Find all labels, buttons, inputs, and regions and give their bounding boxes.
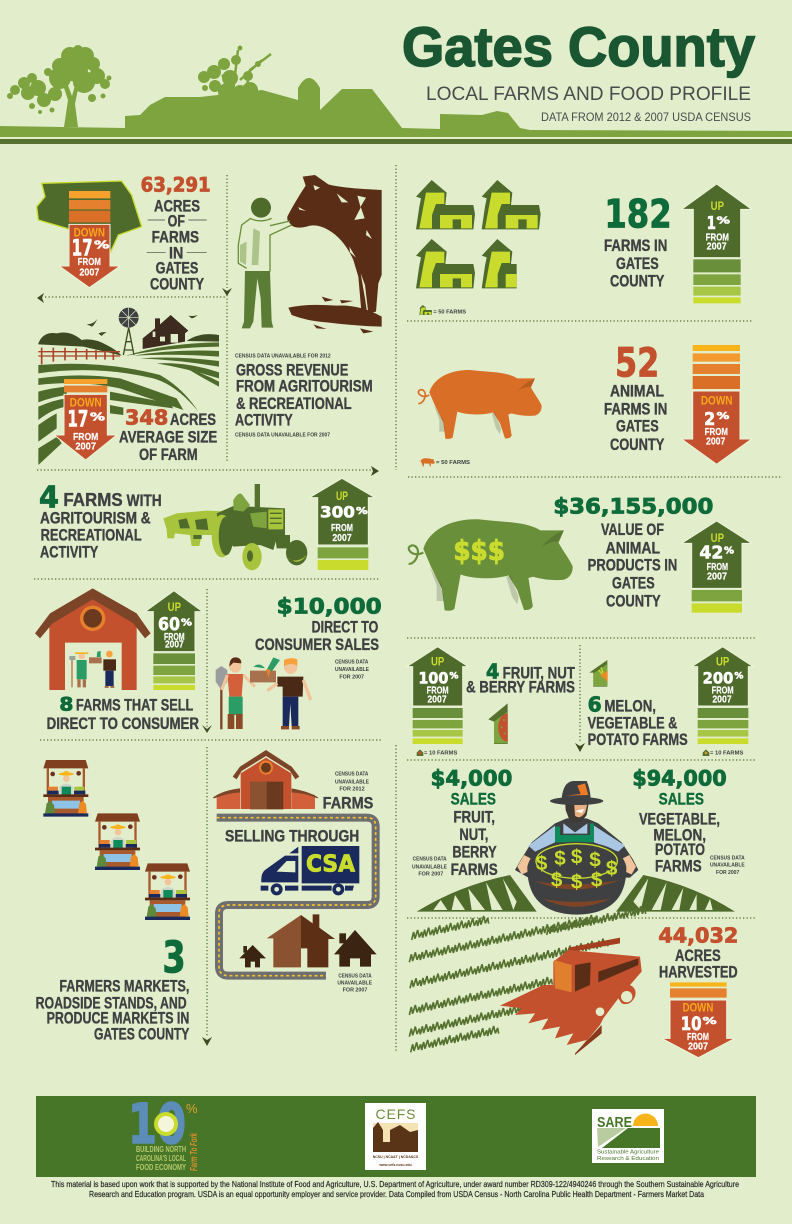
stat: $4,000 fruit sales: FRUIT, — [453, 808, 495, 827]
stat: 182 farms: 182 — [604, 191, 672, 237]
stat: $36,155,000: PRODUCTS IN — [588, 556, 677, 575]
logo: CEFS: www.cefs.ncsu.edu — [378, 1163, 412, 1167]
arrow: up 100%: % — [449, 672, 459, 682]
title: Gates County — [402, 15, 755, 78]
stat: 348 acres average size: OF FARM — [139, 445, 198, 464]
stat: $94,000 vegetable sales: FOR 2007 — [716, 870, 739, 876]
legend: 10 farms carrot — [703, 749, 744, 756]
header: farm landscape silhouette — [0, 45, 792, 137]
icon: farm buildings pictogram — [416, 180, 541, 288]
stat: 3 farmers markets: GATES COUNTY — [94, 1025, 189, 1044]
text: gross revenue from agritourism: & RECREATIONAL — [236, 394, 352, 413]
subtitle: LOCAL FARMS AND FOOD PROFILE — [426, 83, 751, 105]
arrow: up 42%: FROM — [707, 562, 728, 573]
arrow: down 17% acres: DOWN — [74, 226, 105, 240]
stat: 8 farms direct to consumer: FARMS THAT SELL — [76, 696, 193, 715]
logo: CEFS — [365, 1103, 426, 1170]
arrow: up 42%: % — [724, 546, 735, 557]
text: gross revenue from agritourism: FROM AGRITOURISM — [236, 377, 373, 396]
icon: crop rows — [409, 906, 646, 1052]
arrow: up 300%: 2007 — [332, 533, 352, 544]
census note 2012: CENSUS DATA — [335, 772, 368, 778]
footer credits: Research and Education program. USDA is an equal opportunity employer and service provider. Data Compiled from USDA Census - North Carolina Public Health Department - Farmers Market Data — [89, 1190, 704, 1199]
panel: markets and CSA — [36, 750, 377, 1044]
stat: 182 farms: GATES — [616, 254, 659, 273]
arrow: up 1%: 2007 — [707, 241, 727, 252]
header stripes — [0, 139, 792, 144]
stat: $36,155,000: $36,155,000 — [553, 494, 713, 519]
stat: $4,000 fruit sales: UNAVAILABLE — [412, 864, 447, 870]
icon: farmers with vegetable crate — [216, 657, 311, 729]
arrow: down 2% — [682, 345, 752, 464]
icon: houses — [239, 914, 377, 967]
arrow: up 60%: % — [181, 617, 193, 628]
stat: 63,291 acres of farms: IN — [169, 243, 183, 262]
arrow: up 100%: 2007 — [427, 694, 447, 705]
stat: 52 animal farms — [604, 341, 667, 454]
logo: CEFS: CEFS — [376, 1106, 416, 1122]
arrow: up 100% — [407, 647, 468, 744]
census note 2012: UNAVAILABLE — [335, 779, 369, 785]
arrow: up 1%: % — [717, 216, 731, 227]
icon: CSA delivery truck — [261, 846, 359, 895]
logo: SARE: Research & Education — [597, 1156, 659, 1162]
stat: 6 melon, vegetable, potato farms: VEGETABLE & — [588, 713, 677, 732]
stat: 63,291 acres of farms: COUNTY — [150, 274, 204, 293]
stat: 44,032 acres harvested — [658, 923, 738, 981]
icon: melon barn — [488, 703, 508, 744]
arrow: up 300%: UP — [336, 489, 348, 503]
icon: child petting cow — [238, 198, 292, 328]
stat: 44,032 acres harvested: 44,032 — [658, 923, 738, 947]
stat: 44,032 acres harvested: HARVESTED — [659, 962, 738, 981]
arrow: up 60%: 2007 — [165, 640, 184, 651]
icon: farmer holding bowl of money: $ — [571, 870, 583, 893]
icon: cow — [287, 175, 382, 333]
arrow: down 10%: 2007 — [688, 1041, 708, 1052]
stat: 52 animal farms: GATES — [616, 417, 659, 436]
stat: $10,000 direct to consumer: FOR 2007 — [339, 674, 364, 680]
stat: $10,000 direct to consumer: CONSUMER SALES — [255, 635, 379, 654]
stat: $4,000 fruit sales: FOR 2007 — [418, 872, 443, 878]
stat: 182 farms: COUNTY — [610, 272, 664, 291]
arrow: down 10%: FROM — [687, 1032, 709, 1043]
panel: animal product value and crop farms — [407, 494, 753, 756]
panel: agritourism farms — [35, 478, 382, 733]
text: gross revenue from agritourism — [235, 353, 373, 438]
icon: CSA delivery truck: CSA — [306, 850, 355, 878]
icon: farmer holding bowl of money: $ — [536, 852, 548, 875]
arrow: down 17% acres: FROM — [78, 257, 101, 268]
logo: CEFS: NCSU | NCA&T | NCDA&CS — [373, 1155, 419, 1159]
stat: 4 fruit, nut and berry farms — [466, 659, 575, 697]
dividers and flow arrows middle left — [34, 579, 383, 1046]
icon: farm landscape — [38, 308, 219, 465]
stat: 44,032 acres harvested: ACRES — [675, 946, 721, 965]
arrow: down 2%: 2 — [704, 410, 715, 430]
stat: $4,000 fruit sales: NUT, — [459, 825, 488, 844]
arrow: down 17% acres: 17 — [72, 237, 93, 262]
icon: farmer holding bowl of money: $ — [551, 869, 563, 892]
stat: 52 animal farms: COUNTY — [610, 435, 664, 454]
stat: $10,000 direct to consumer: DIRECT TO — [312, 617, 378, 636]
stat: $4,000 fruit sales: BERRY — [452, 843, 497, 862]
census note 2007: UNAVAILABLE — [337, 980, 372, 986]
legend: 50 farms pig — [419, 458, 470, 467]
arrow: up 60%: 60 — [158, 615, 180, 635]
icon: red barn with farmers — [35, 588, 151, 690]
stat: 63,291 acres of farms — [141, 174, 211, 293]
arrow: down 17% farm size: 2007 — [75, 442, 96, 453]
stat: 6 melon, vegetable, potato farms: MELON, — [604, 697, 656, 716]
stat: $4,000 fruit sales: FARMS — [451, 860, 498, 879]
stat: 4 farms with agritourism: RECREATIONAL — [41, 526, 142, 545]
stat: 8 farms direct to consumer: DIRECT TO CONSUMER — [47, 714, 199, 733]
stat: 8 farms direct to consumer: 8 — [59, 695, 73, 716]
text: gross revenue from agritourism: ACTIVITY — [235, 411, 293, 430]
arrow: up 300%: FROM — [331, 523, 353, 534]
stat: $4,000 fruit sales: $4,000 — [431, 767, 512, 792]
panel: acres, cow, farm size — [37, 174, 382, 465]
stat: 3 farmers markets: ROADSIDE STANDS, AND — [36, 993, 187, 1012]
arrow: down 2%: DOWN — [701, 393, 732, 407]
text: gross revenue from agritourism: CENSUS DATA UNAVAILABLE FOR 2007 — [235, 432, 330, 438]
stat: 4 farms with agritourism — [39, 480, 162, 561]
data source note: DATA FROM 2012 & 2007 USDA CENSUS — [541, 110, 751, 124]
stat: $36,155,000 — [553, 494, 713, 611]
icon: orange pig — [418, 370, 542, 439]
logo: 10% campaign: 10 — [128, 1092, 186, 1156]
stat: 348 acres average size: 348 — [125, 405, 168, 429]
stat: 348 acres average size: ACRES — [170, 410, 216, 429]
census note 2007: CENSUS DATA — [338, 973, 372, 979]
dividers right middle — [407, 638, 756, 918]
arrow: up 200% — [692, 647, 753, 744]
icon: farmer holding bowl of money: $ — [589, 849, 601, 872]
county map — [37, 181, 142, 253]
stat: 4 farms with agritourism: FARMS — [63, 489, 123, 510]
arrow: up 1%: 1 — [707, 214, 716, 234]
stat: 6 melon, vegetable, potato farms — [588, 693, 688, 749]
arrow: up 300% — [309, 478, 375, 570]
stat: $94,000 vegetable sales: UNAVAILABLE — [710, 863, 745, 869]
arrow: up 200%: FROM — [712, 685, 734, 696]
arrow: up 42%: 2007 — [707, 571, 727, 582]
logo: SARE: SARE — [597, 1114, 632, 1131]
logo: 10% campaign: BUILDING NORTH — [136, 1145, 186, 1154]
arrow: up 60% — [145, 591, 203, 690]
arrow: down 10%: DOWN — [683, 1001, 713, 1015]
legend: 10 farms melon — [417, 749, 458, 756]
arrow: down 2%: 2007 — [706, 436, 725, 447]
flow arrows upper left — [37, 165, 396, 476]
stat: 3 farmers markets: FARMERS MARKETS, — [59, 977, 189, 996]
stat: 182 farms — [604, 191, 672, 291]
stat: $10,000 direct to consumer: UNAVAILABLE — [335, 667, 369, 673]
arrow: up 100%: UP — [431, 655, 444, 669]
footer credits — [51, 1180, 739, 1199]
stat: 63,291 acres of farms: OF — [168, 212, 185, 231]
stat: $94,000 vegetable sales: MELON, — [653, 826, 706, 845]
icon: farmer holding bowl of money: $ — [571, 845, 583, 868]
icon: tractor — [163, 484, 307, 570]
stat: 63,291 acres of farms: FARMS — [152, 228, 199, 247]
legend: 10 farms carrot: = 10 FARMS — [710, 750, 744, 756]
arrow: down 2%: % — [717, 411, 730, 422]
arrow: up 1%: UP — [711, 199, 724, 213]
icon: CSA barn — [213, 750, 318, 809]
arrow: up 300%: % — [356, 506, 368, 517]
arrow: down 10%: % — [703, 1016, 717, 1027]
label: farms: FARMS — [323, 793, 373, 812]
stat: $94,000 vegetable sales — [632, 767, 745, 876]
panel: farms and animal farms — [416, 180, 752, 467]
icon: farmer holding bowl of money — [515, 781, 638, 914]
arrow: up 42%: UP — [711, 531, 724, 545]
icon: market stands — [43, 760, 190, 920]
arrow: down 10% — [662, 982, 735, 1058]
icon: green pig with dollar signs — [409, 519, 573, 611]
arrow: up 200%: 200 — [703, 668, 733, 687]
footer band — [36, 1096, 756, 1177]
stat: 3 farmers markets: PRODUCE MARKETS IN — [47, 1009, 189, 1028]
stat: 63,291 acres of farms: 63,291 — [141, 174, 211, 197]
arrow: down 17% acres — [59, 191, 120, 288]
arrow: up 42%: 42 — [699, 543, 723, 563]
stat: $4,000 fruit sales: SALES — [451, 789, 496, 808]
stat: 6 melon, vegetable, potato farms: 6 — [588, 693, 602, 717]
icon: striped field hills — [417, 875, 735, 912]
stat: 8 farms direct to consumer — [47, 695, 199, 733]
legend: 50 farms — [419, 305, 466, 315]
icon: green pig with dollar signs: $$$ — [453, 536, 505, 567]
arrow: down 17% farm size: 17 — [67, 408, 88, 433]
stat: 52 animal farms: ANIMAL — [610, 382, 664, 401]
arrow: up 100%: FROM — [427, 685, 449, 696]
arrow: down 17% acres: % — [94, 238, 110, 251]
legend: 50 farms pig: = 50 FARMS — [436, 460, 470, 466]
stat: $94,000 vegetable sales: CENSUS DATA — [710, 855, 745, 861]
stat: $10,000 direct to consumer — [255, 594, 382, 680]
right flow divider — [395, 745, 397, 1052]
arrow: up 300%: 300 — [320, 503, 355, 522]
logo: 10% campaign: % — [186, 1101, 198, 1116]
stat: 182 farms: FARMS IN — [604, 236, 667, 255]
arrow: up 1% — [682, 184, 752, 303]
census note 2012 — [335, 772, 369, 793]
stat: 4 fruit, nut and berry farms: FRUIT, NUT — [503, 663, 575, 682]
arrow: down 17% acres: 2007 — [79, 267, 99, 278]
arrow: down 2%: FROM — [705, 427, 728, 438]
stat: $94,000 vegetable sales: SALES — [659, 789, 704, 808]
arrow: up 60%: UP — [168, 600, 181, 614]
arrow: up 1%: FROM — [706, 232, 729, 243]
panel: crop sales and harvest — [409, 767, 745, 1058]
stat: 63,291 acres of farms: GATES — [156, 258, 198, 277]
icon: farmer holding bowl of money: $ — [606, 857, 618, 880]
arrow: down 17% farm size: FROM — [73, 432, 98, 443]
arrow: up 200%: 2007 — [712, 694, 732, 705]
stat: $36,155,000: GATES — [612, 573, 655, 592]
stat: 4 fruit, nut and berry farms: 4 — [486, 659, 499, 683]
legend: 50 farms: = 50 FARMS — [433, 309, 466, 315]
stat: 4 farms with agritourism: ACTIVITY — [40, 542, 98, 561]
stat: $94,000 vegetable sales: POTATO — [655, 840, 705, 859]
stat: 52 animal farms: FARMS IN — [604, 399, 667, 418]
icon: road — [217, 818, 376, 976]
stat: $94,000 vegetable sales: $94,000 — [632, 767, 727, 792]
icon: combine harvester — [500, 938, 642, 1055]
stat: $4,000 fruit sales: CENSUS DATA — [413, 857, 447, 863]
stat: 6 melon, vegetable, potato farms: POTATO FARMS — [588, 730, 688, 749]
arrow: up 42% — [682, 521, 752, 613]
stat: $36,155,000: COUNTY — [606, 592, 661, 611]
arrow: up 200%: UP — [716, 655, 729, 669]
stat: 348 acres average size — [119, 405, 217, 464]
icon: carrot barn — [589, 660, 608, 687]
icon: farmer holding bowl of money: $ — [554, 847, 566, 870]
arrow: down 17% farm size: % — [90, 411, 105, 424]
logo: 10% campaign: FOOD ECONOMY — [136, 1163, 186, 1172]
stat: 348 acres average size: AVERAGE SIZE — [119, 427, 217, 446]
stat: $4,000 fruit sales — [412, 767, 512, 879]
stat: $10,000 direct to consumer: CENSUS DATA — [335, 659, 368, 665]
logo: SARE: Sustainable Agriculture — [597, 1150, 659, 1156]
stat: $36,155,000: VALUE OF — [601, 520, 664, 539]
stat: $36,155,000: ANIMAL — [606, 538, 660, 557]
stat: $10,000 direct to consumer: $10,000 — [277, 594, 382, 619]
icon: farmer holding bowl of money: $ — [591, 869, 603, 892]
logo: SARE — [592, 1109, 664, 1163]
logo: 10% campaign: Farm To Fork — [189, 1133, 200, 1171]
stat: $94,000 vegetable sales: VEGETABLE, — [639, 809, 720, 828]
arrow: down 10%: 10 — [681, 1014, 702, 1035]
text: gross revenue from agritourism: CENSUS DATA UNAVAILABLE FOR 2012 — [235, 353, 331, 359]
stat: 52 animal farms: 52 — [615, 341, 659, 387]
arrow: up 200%: % — [734, 672, 744, 682]
census note 2007 — [337, 973, 372, 994]
stat: 4 farms with agritourism: AGRITOURISM & — [40, 508, 151, 527]
arrow: down 17% farm size: DOWN — [70, 396, 102, 410]
arrow: down 17% farm size — [54, 379, 117, 460]
stat: 3 farmers markets — [36, 932, 189, 1044]
census note 2012: FOR 2012 — [339, 787, 365, 793]
arrow: up 100%: 100 — [418, 668, 448, 687]
stat: $94,000 vegetable sales: FARMS — [655, 857, 702, 876]
census note 2007: FOR 2007 — [343, 988, 367, 994]
label: selling through: SELLING THROUGH — [225, 827, 359, 846]
dividers right upper — [407, 321, 781, 477]
stat: 3 farmers markets: 3 — [162, 932, 186, 983]
logo: 10% campaign: CAROLINA'S LOCAL — [136, 1154, 186, 1163]
stat: 4 farms with agritourism: 4 — [39, 480, 59, 515]
stat: 4 farms with agritourism: WITH — [127, 491, 162, 510]
legend: 10 farms melon: = 10 FARMS — [424, 750, 458, 756]
text: gross revenue from agritourism: GROSS REVENUE — [236, 361, 348, 380]
stat: 4 fruit, nut and berry farms: & BERRY FARMS — [466, 678, 575, 697]
arrow: up 60%: FROM — [164, 632, 185, 643]
stat: 63,291 acres of farms: ACRES — [154, 197, 200, 216]
